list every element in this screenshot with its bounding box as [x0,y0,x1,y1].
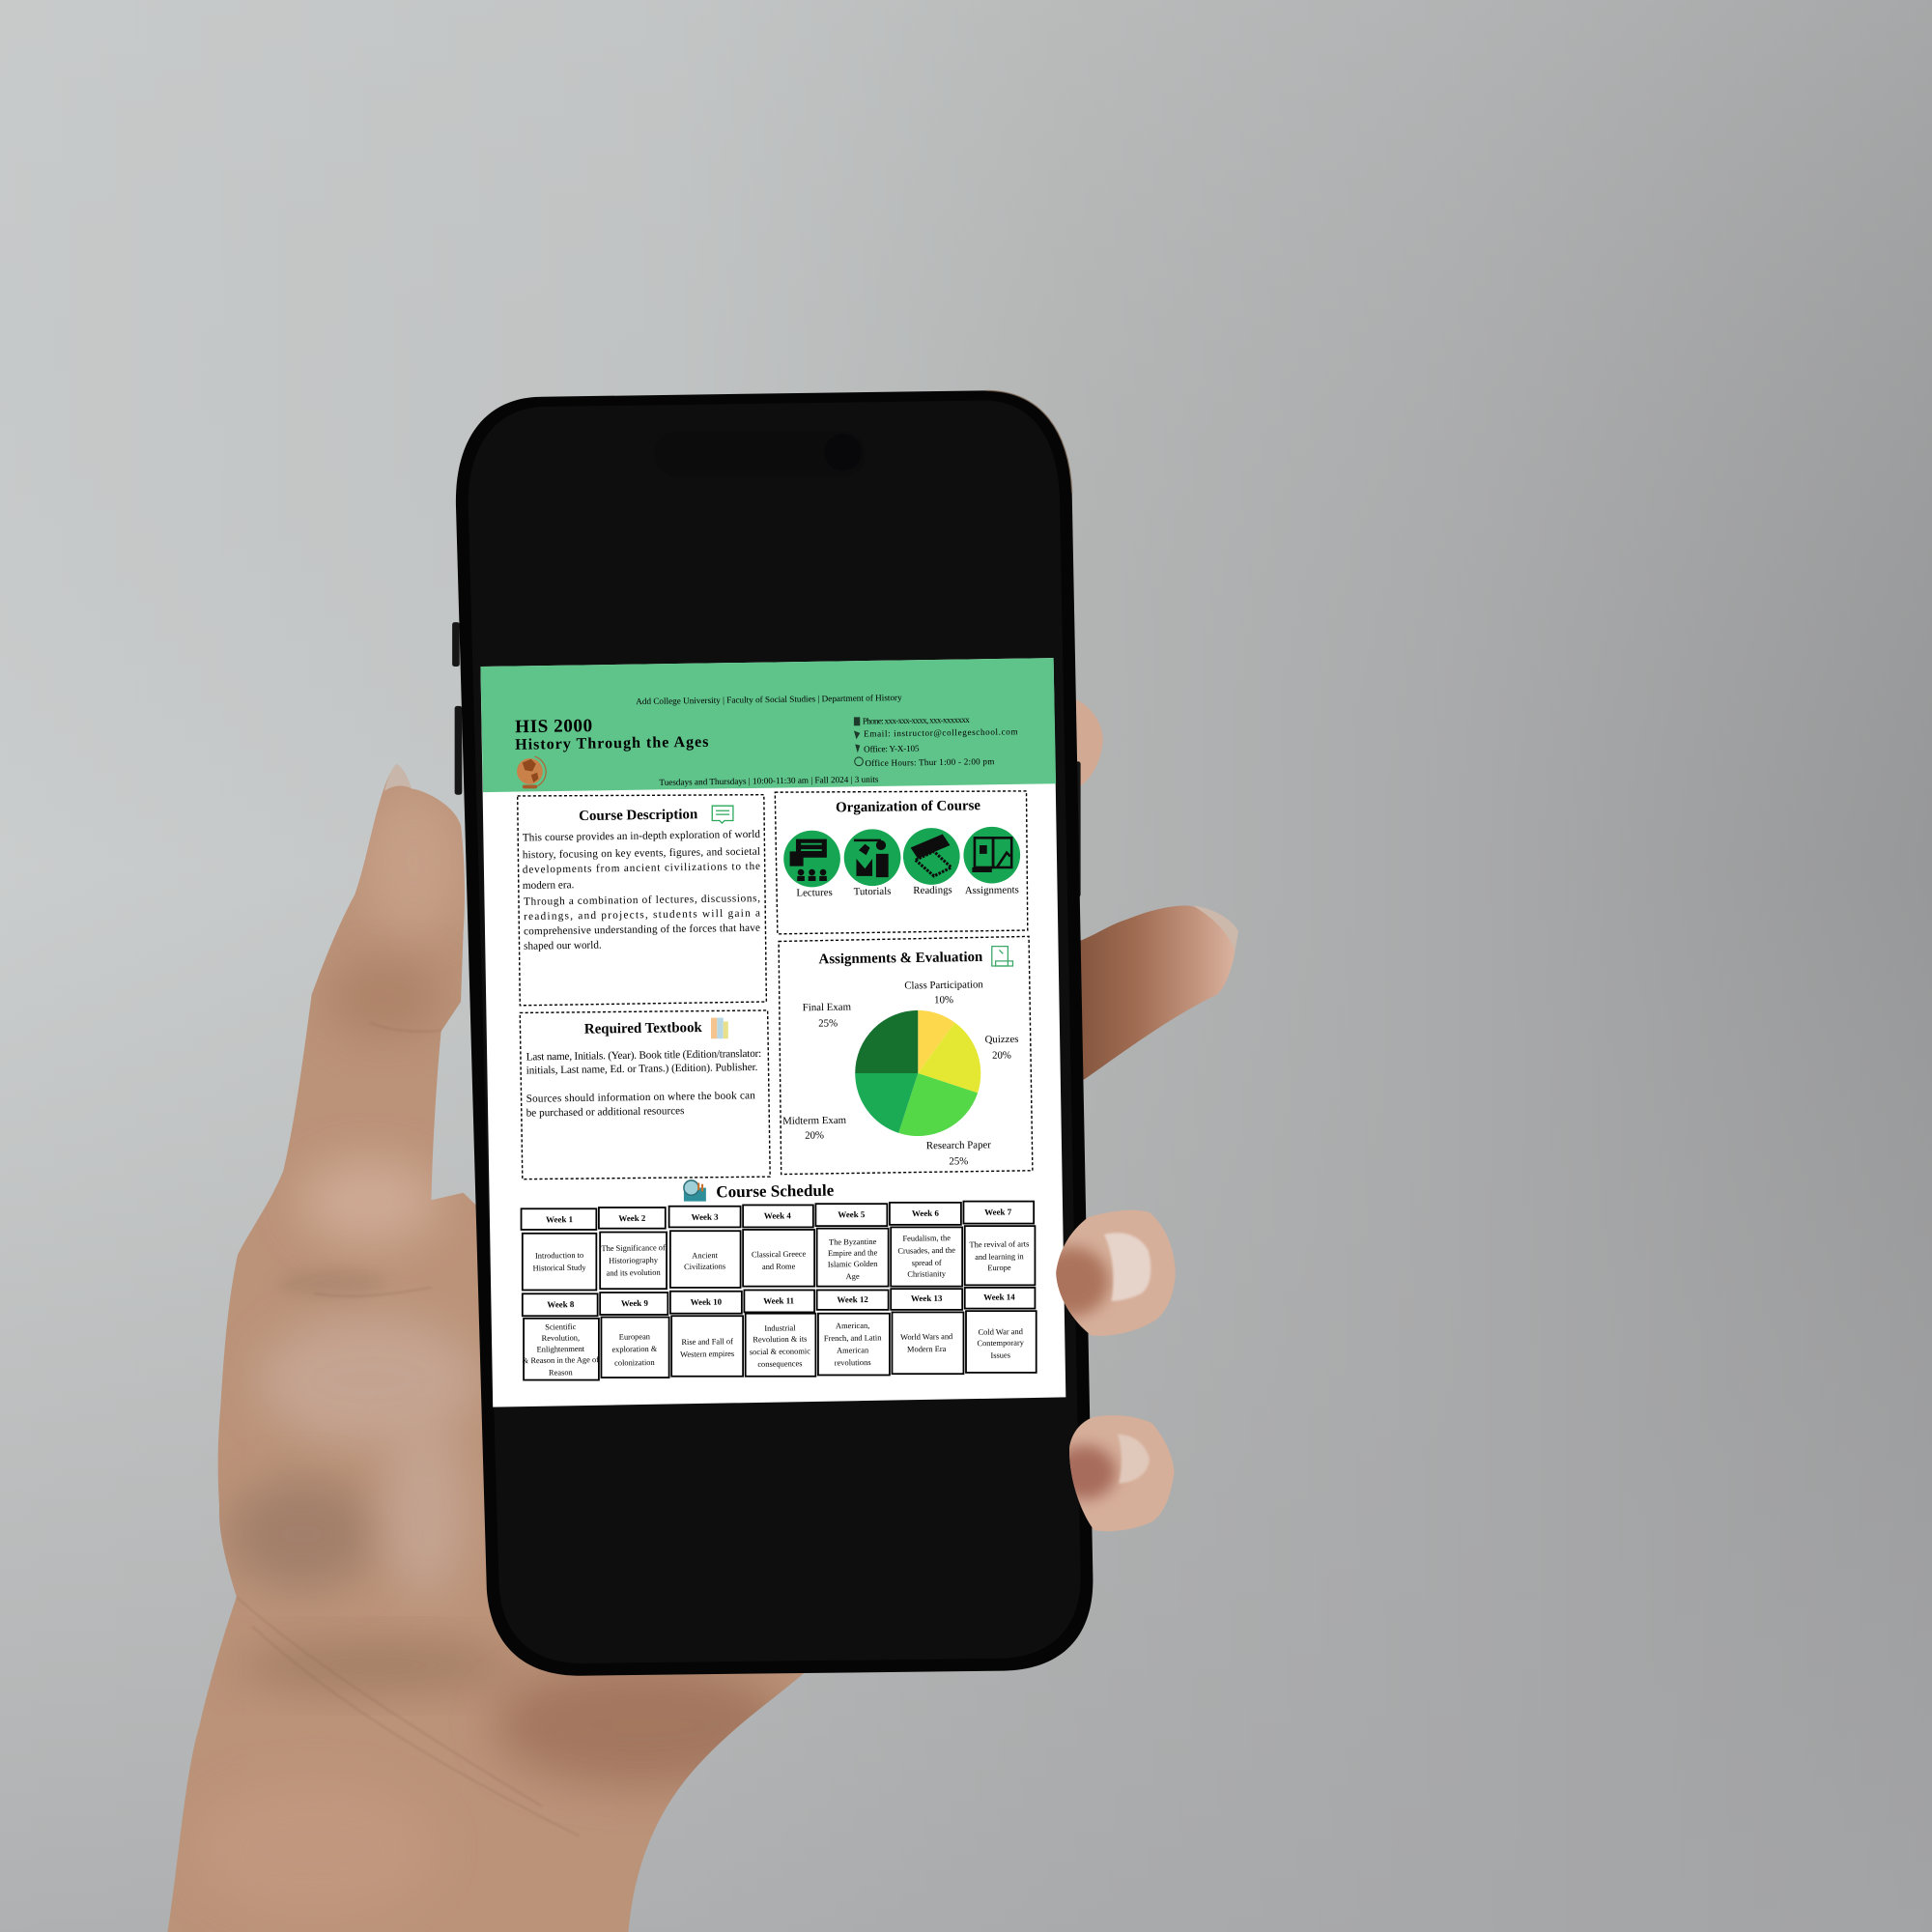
row 1 headers: Week 5 [838,1209,866,1219]
row 1 topics: Europe [987,1264,1011,1272]
row 2 topics: Modern Era [907,1345,947,1354]
body text: comprehensive understanding of the forces that have [524,923,760,937]
row 2 topics: consequences [757,1359,803,1369]
body text: Sources should information on where the book can [526,1090,755,1105]
row 1 headers: Week 6 [912,1208,940,1218]
row 2 headers [523,1288,1035,1316]
icon: assignments [963,827,1020,884]
row 2 topics: Reason [549,1368,574,1378]
row 2 topics: Revolution, [542,1333,580,1343]
heading: course schedule: Course Schedule [716,1181,835,1201]
palm creases [237,1023,579,1836]
row 2 headers: Week 10 [691,1297,723,1307]
row 2 topics: Rise and Fall of [681,1337,733,1347]
row 1 topics: Historiography [609,1256,659,1265]
circle labels: Lectures [796,887,833,899]
row 1 topics: Ancient [692,1251,719,1260]
body text: history, focusing on key events, figures, and societal [523,846,760,861]
icon: globe [517,756,546,788]
body text [526,1048,761,1120]
heading: Course Description [579,807,698,824]
row 2 topics: European [619,1332,651,1342]
row 1 headers: Week 3 [692,1212,719,1222]
pie chart [855,1010,980,1136]
row 2 topics: Cold War and [978,1327,1024,1337]
contact details: Office: Y-X-105 [864,744,920,753]
course title: History Through the Ages [515,734,710,753]
row 2 headers: Week 13 [911,1293,943,1303]
row 1 topics: and learning in [975,1252,1025,1262]
little finger [1069,1415,1175,1532]
body text: initials, Last name, Ed. or Trans.) (Edition). Publisher. [526,1062,758,1076]
index finger top [1060,699,1103,791]
pie labels: Quizzes [984,1034,1019,1045]
pie labels: Research Paper [926,1139,991,1151]
panel: assignments and evaluation [779,936,1033,1175]
row 2 headers: Week 9 [621,1298,648,1308]
dynamic island [654,431,865,477]
row 2 topics: American, [836,1321,869,1330]
panel: course description [518,795,766,1006]
icon: tutorials [844,829,900,886]
icon: assignment sheet [992,947,1012,966]
pie labels: 10% [934,994,953,1006]
row 1 topics: The revival of arts [969,1239,1029,1249]
body text: shaped our world. [524,940,602,952]
body text: This course provides an in-depth exploration of world [523,829,760,843]
row 2 topics: Issues [990,1350,1010,1360]
row 1 topics: Historical Study [533,1264,586,1272]
hand behind phone [148,699,1238,1932]
body text: developments from ancient civilizations to the [523,861,760,876]
pie labels: 20% [805,1129,824,1142]
ring fingernail [1104,1233,1151,1301]
icon: magnifier and books [684,1180,706,1202]
row 1 headers [522,1202,1034,1230]
row 2 topics: World Wars and [900,1332,953,1342]
row 2 topics: Contemporary [977,1338,1025,1348]
icon: speech bubble [712,806,733,823]
header band [480,658,1056,792]
icon: lectures [783,831,840,887]
row 2 topics: Western empires [680,1350,734,1359]
row 1 topics: Classical Greece [752,1250,807,1259]
little fingernail [1118,1435,1150,1484]
bronze rim highlight [985,390,1072,493]
icon: books [711,1018,728,1038]
contact details: Phone: xxx-xxx-xxxx, xxx-xxxxxxx [863,715,970,726]
ring finger [1056,1209,1176,1336]
heading: Assignments & Evaluation [818,950,983,967]
heading: Organization of Course [836,798,980,815]
row 1 topics [523,1226,1035,1290]
pie labels [782,979,1019,1168]
row 1 topics: Introduction to [535,1251,583,1261]
row 2 topics: & Reason in the Age of [523,1355,599,1365]
body text: be purchased or additional resources [526,1105,685,1120]
contact details: Email: instructor@collegeschool.com [864,726,1018,739]
row 2 topics: American [837,1346,869,1355]
contact details [854,715,1018,768]
icon: readings [903,828,960,885]
row 1 topics: Islamic Golden [828,1260,878,1269]
circle labels [796,884,1019,899]
circle labels: Assignments [965,884,1019,896]
contact details: Office Hours: Thur 1:00 - 2:00 pm [865,756,994,768]
pie labels: Class Participation [904,979,983,992]
pie labels: 25% [949,1155,968,1168]
university line: Add College University | Faculty of Social Studies | Department of History [636,693,902,706]
heading: Required Textbook [584,1020,703,1037]
row 1 topics: The Significance of [601,1243,666,1253]
circle labels: Readings [913,884,952,896]
pie labels: 20% [992,1050,1011,1062]
fingertips over phone [1056,1209,1176,1532]
row 2 topics: exploration & [611,1345,658,1354]
row 2 headers: Week 14 [983,1292,1015,1302]
pie labels: Midterm Exam [782,1115,847,1127]
course code: HIS 2000 [515,716,593,737]
panel: organization of course [775,791,1028,934]
row 2 topics: Enlightenment [537,1345,585,1354]
palm and thumb [168,764,804,1932]
row 2 headers: Week 8 [547,1299,575,1310]
row 1 topics: Empire and the [828,1248,878,1258]
row 2 topics: revolutions [835,1358,871,1368]
row 1 topics: The Byzantine [829,1237,877,1247]
schedule table [522,1202,1037,1380]
row 1 headers: Week 2 [618,1213,646,1223]
row 2 topics: social & economic [750,1347,810,1356]
row 1 topics: spread of [912,1259,942,1267]
row 2 headers: Week 12 [837,1294,868,1304]
body text: Through a combination of lectures, discussions, [524,893,760,908]
middle finger nail rim [1193,906,1238,952]
row 1 topics: Age [846,1272,860,1281]
row 1 topics: Civilizations [684,1262,725,1271]
row 1 topics: and Rome [762,1263,796,1271]
schedule line: Tuesdays and Thursdays | 10:00-11:30 am | Fall 2024 | 3 units [659,775,879,787]
row 2 topics [523,1311,1037,1380]
row 2 topics: colonization [614,1358,656,1368]
row 2 topics: Industrial [764,1323,796,1333]
row 2 topics: Scientific [545,1322,577,1332]
row 1 headers: Week 1 [546,1214,573,1225]
phone body [452,390,1093,1676]
pie labels: 25% [818,1017,838,1030]
row 2 topics: French, and Latin [824,1333,882,1343]
row 1 headers: Week 7 [984,1207,1012,1217]
row 1 topics: Crusades, and the [897,1246,955,1256]
thumbnail [384,764,412,791]
row 2 topics: Revolution & its [753,1335,807,1344]
panel: required textbook [520,1010,770,1179]
pie labels: Final Exam [803,1002,852,1013]
row 1 headers: Week 4 [764,1210,791,1221]
white page [480,658,1065,1407]
body text [523,829,760,952]
row 1 topics: Christianity [907,1269,947,1279]
side buttons [452,622,460,667]
row 1 topics: and its evolution [607,1268,661,1278]
middle finger [1065,906,1238,1084]
body text: Last name, Initials. (Year). Book title (Edition/translator: [526,1048,761,1063]
row 1 topics: Feudalism, the [902,1234,951,1243]
infographic screen [480,658,1065,1407]
display glass [469,401,1081,1663]
body text: modern era. [523,879,575,892]
body text: readings, and projects, students will gain a [524,907,760,923]
row 2 headers: Week 11 [763,1295,794,1306]
circle labels: Tutorials [854,886,892,897]
